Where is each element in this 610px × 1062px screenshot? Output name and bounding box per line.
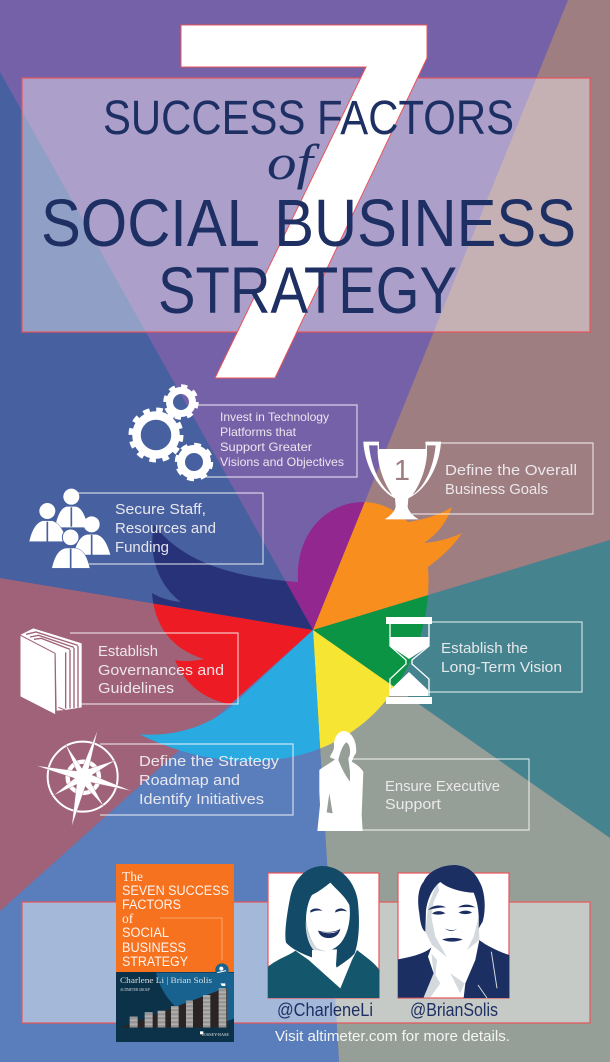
factor: secure staff: Funding bbox=[115, 539, 169, 556]
icon: compass rose bbox=[36, 730, 132, 827]
factor: governance: Governances and bbox=[98, 662, 224, 679]
icon: businesswoman silhouette bbox=[317, 731, 363, 831]
title text: of bbox=[267, 134, 320, 190]
factor: executive support: Ensure Executive bbox=[385, 778, 500, 795]
icon: hourglass bbox=[386, 617, 432, 704]
factor: long-term vision: Establish the bbox=[441, 641, 528, 657]
factor: invest in technology: Invest in Technology bbox=[220, 410, 329, 424]
icon: gears bbox=[132, 386, 211, 479]
factor: strategy roadmap: Roadmap and bbox=[139, 772, 240, 789]
icon: business people bbox=[29, 489, 111, 568]
handle: BrianSolis: @BrianSolis bbox=[410, 999, 498, 1020]
book cover: of bbox=[122, 911, 134, 926]
bottom panel bbox=[22, 902, 590, 1023]
factor: invest in technology: Support Greater bbox=[220, 440, 312, 454]
book cover: JOSSEY-BASE bbox=[202, 1032, 229, 1037]
big numeral seven bbox=[181, 25, 427, 378]
factor: strategy roadmap bbox=[100, 744, 293, 815]
handle: CharleneLi: @CharleneLi bbox=[277, 999, 373, 1020]
title text: STRATEGY bbox=[158, 253, 457, 327]
factor: long-term vision bbox=[428, 622, 582, 692]
factor: long-term vision: Long-Term Vision bbox=[441, 660, 562, 676]
icon: trophy bbox=[363, 442, 441, 519]
title text bbox=[41, 92, 576, 327]
book cover: SOCIAL bbox=[122, 925, 169, 940]
factor: secure staff bbox=[78, 493, 263, 564]
factor: invest in technology: Platforms that bbox=[220, 425, 297, 439]
book cover: The bbox=[122, 869, 143, 884]
portrait: Brian Solis bbox=[398, 865, 509, 998]
book cover bbox=[116, 864, 234, 1042]
icon: trophy: 1 bbox=[394, 455, 410, 487]
factor: secure staff: Resources and bbox=[115, 520, 216, 537]
factor: strategy roadmap: Define the Strategy bbox=[139, 753, 280, 770]
factor: governance: Establish bbox=[98, 643, 158, 660]
book cover: BUSINESS bbox=[122, 940, 186, 955]
factor: executive support: Support bbox=[385, 796, 442, 813]
factor: define goals bbox=[412, 443, 593, 514]
twitter bird split into colour wedges bbox=[139, 502, 462, 762]
title panel bbox=[22, 78, 590, 332]
book cover: Charlene Li | Brian Solis bbox=[120, 975, 212, 985]
footer link text: Visit altimeter.com for more details. bbox=[275, 1029, 510, 1045]
factor: invest in technology bbox=[195, 405, 357, 477]
portrait: Charlene Li bbox=[268, 866, 379, 998]
factor: governance bbox=[70, 633, 238, 704]
factor: define goals: Define the Overall bbox=[445, 463, 577, 479]
factor: define goals: Business Goals bbox=[445, 482, 548, 498]
book cover: SEVEN SUCCESS bbox=[122, 883, 229, 898]
factor: executive support bbox=[350, 759, 529, 830]
factor: secure staff: Secure Staff, bbox=[115, 501, 206, 518]
book cover: STRATEGY bbox=[122, 954, 188, 969]
factor: governance: Guidelines bbox=[98, 680, 174, 697]
title text: SUCCESS FACTORS bbox=[103, 92, 514, 145]
factor: invest in technology: Visions and Objectives bbox=[220, 455, 344, 469]
book cover: FACTORS bbox=[122, 897, 181, 912]
book cover: ALTIMETER GROUP bbox=[120, 988, 150, 992]
icon: book bbox=[20, 628, 82, 715]
factor: strategy roadmap: Identify Initiatives bbox=[139, 791, 264, 808]
